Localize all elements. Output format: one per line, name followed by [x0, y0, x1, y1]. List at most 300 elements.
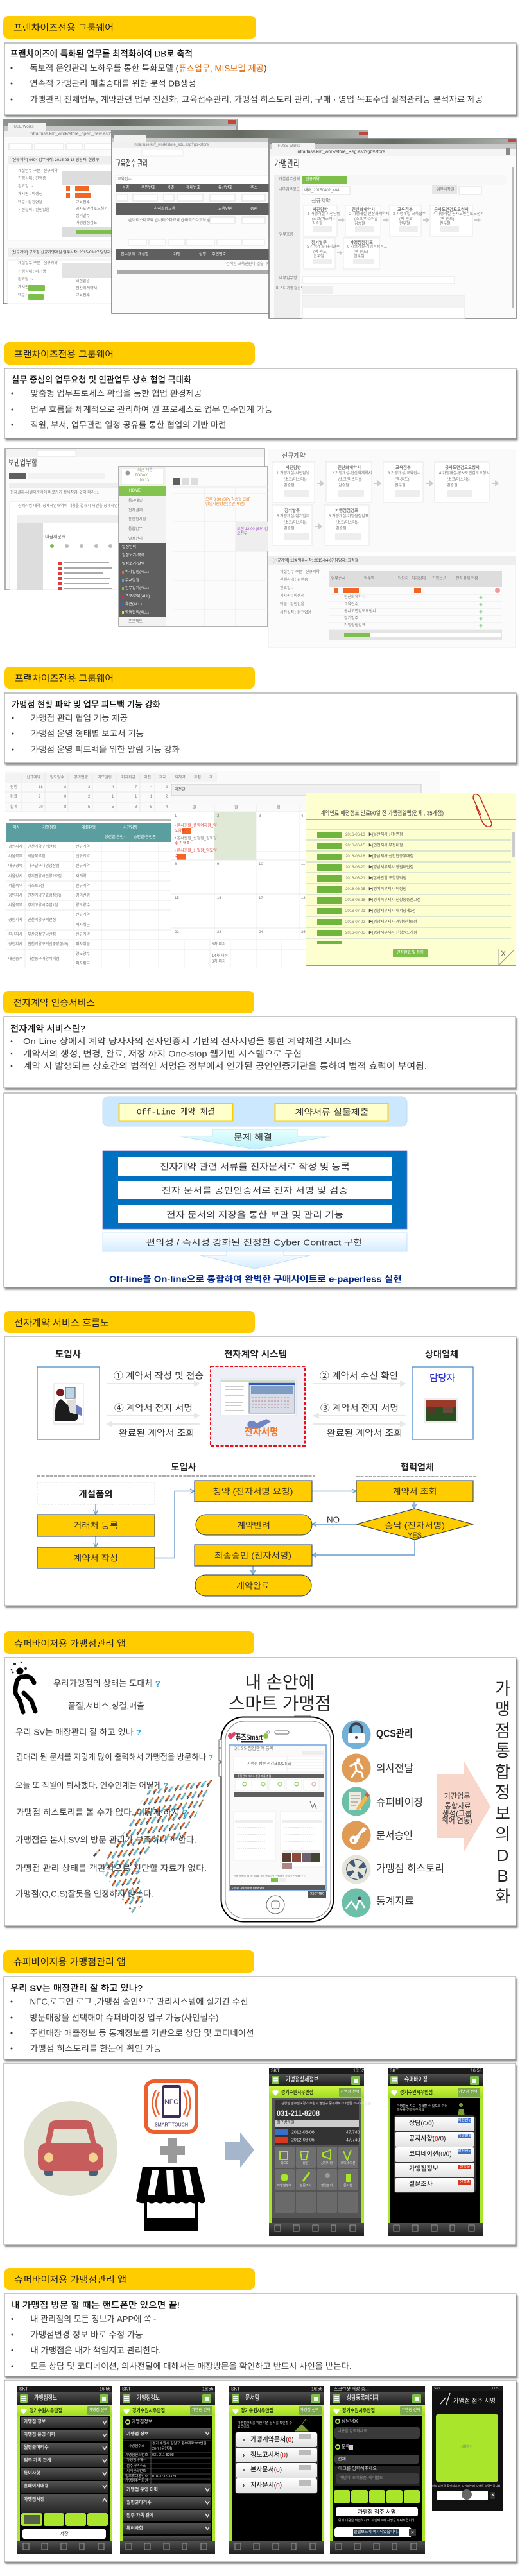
table: teal store list: 8차 퍼자 — [212, 959, 226, 964]
text block: franchise DB: 가맹관리 전체업무, 계약관련 업무 전산화, 교육접수관리, 가맹점 히스토리 관리, 구매 · 영업 목표수립 실적관리등 분석자료 제공 — [30, 95, 483, 104]
text block: collaboration: 맞춤형 업무프로세스 확립을 통한 협업 환경제공 — [31, 389, 202, 398]
note: expiring contracts: 2016-06-20 — [345, 866, 365, 870]
screenshot: calendar with sidebar menu: 오전 12:00 (SP) 김승철 회 — [237, 526, 280, 531]
section 1: groupware optimisation — [3, 16, 516, 318]
step: register partner: 거래처 등록 — [73, 1521, 118, 1530]
title: smart franchise in my hand: 스마트 가맹점 — [229, 1694, 331, 1713]
screenshot: new contract workflow: 6 가맹개설-가맹점점검표 — [329, 513, 369, 519]
screenshot: education management: 성명 — [199, 252, 206, 257]
question list: 우리가맹점의 상태는 도대체 ? — [53, 1679, 160, 1688]
screen: QCS result: 가맹점 방문 점검 내용을 확인하였으며 가맹점주 본인이 서명합니다. — [234, 1874, 306, 1878]
screenshot: calendar with sidebar menu: 일정보기-달력 — [122, 561, 144, 566]
table: teal store list: 테스트2점 — [28, 883, 44, 888]
icon: NFC smart touch: NFC — [164, 2099, 178, 2106]
phone screen: supervising: 16:53 — [471, 2069, 482, 2073]
exchange arrows and labels: ④ 계약서 전자 서명 — [114, 1403, 193, 1413]
screenshot: work progress table: 집기발주 — [344, 615, 359, 621]
phone screen: store detail: 16:52 — [353, 2069, 365, 2073]
arrow: problem solved — [180, 1129, 329, 1149]
step: contract complete: 계약완료 — [236, 1581, 270, 1590]
icon: NFC smart touch — [146, 2081, 196, 2132]
phone screen: store info detail: 점주휴대폰번호 — [125, 2473, 148, 2478]
phone screen: documents: 지사문서(0) — [250, 2481, 282, 2489]
phone screen: supervising: 설문조사 — [409, 2181, 433, 2188]
step: rejection: NO — [327, 1515, 340, 1525]
screenshot: new contract workflow: (소크(마스터)) — [284, 520, 307, 525]
arrow: integrated data: 생성(그룹 — [442, 1809, 472, 1818]
table: contract statistics: 8 — [135, 805, 137, 809]
section 7: NFC login — [3, 1950, 516, 2245]
swimlane headings: 협력업체 — [401, 1462, 434, 1472]
phone screen: consultation form: 분류 — [342, 2444, 350, 2449]
table: teal store list: 인천계양구계산중앙점(R) — [28, 941, 69, 947]
table: teal store list: 신규계약 — [76, 912, 91, 917]
screenshot: new contract workflow: (팩-원도) — [395, 477, 410, 482]
vertical title: 화 — [495, 1887, 510, 1906]
phone screen: store detail: 가맹점상세정보 — [286, 2075, 318, 2083]
screenshot: store open list: 교육접수 — [76, 293, 91, 298]
problem boxes: 계약서류 실물제출 — [295, 1108, 369, 1117]
screenshot: store open list: [신규계약] 구로점 신규가맹계실 업무시작: 2015-03-27 담당자: 김승철 — [12, 250, 123, 255]
column headings — [55, 1349, 458, 1359]
question list: 가맹점 관리 상태를 객관적으로 진단할 자료가 없다. — [15, 1864, 207, 1873]
table: contract statistics — [5, 771, 440, 812]
screenshot: new contract workflow: (소크(마스터)) — [284, 477, 307, 482]
phone screen: documents: 가맹계약문서(0) — [250, 2435, 293, 2444]
screenshot: store open list: intra.fuse.kr/f_work/store_open_new.asp?gb=store — [30, 132, 130, 136]
title: smart franchise in my hand — [229, 1673, 331, 1713]
table: contract statistics: 신규계약 — [26, 775, 41, 780]
table: teal store list: 대구달구대명남산점 — [28, 863, 60, 868]
phone screen: documents: 있습니다. — [238, 2425, 250, 2429]
screenshot: store open list: 완료일 : - — [18, 184, 33, 189]
screenshot: new contract workflow: 사전답방 — [286, 465, 301, 470]
phone screen: consultation form: 태그를 입력해주세요 — [338, 2466, 377, 2471]
arrow: result — [200, 1251, 310, 1269]
screenshot: calendar with sidebar menu: 전자결재 — [128, 508, 143, 513]
question list: 가맹점 히스토리를 볼 수가 없다. 어떻게 하지 ? — [16, 1807, 187, 1817]
screenshot: new contract workflow: 집기발주 — [284, 507, 300, 513]
blue solution panel — [103, 1151, 407, 1229]
arrow: integrated data: 통합자료 — [444, 1801, 471, 1810]
calendar: monthly schedule: 1 — [175, 814, 177, 818]
screenshot: calendar with sidebar menu: 프로젝트 — [128, 619, 143, 624]
screenshot: franchise management form: 업무시작일 — [437, 187, 455, 192]
blue solution panel: 전자 문서의 저장을 통한 보관 및 관리 기능 — [166, 1210, 343, 1219]
screenshot: store open list: 계시판 : 미생성 — [18, 191, 42, 196]
question list — [15, 1679, 213, 1898]
conclusion text: Off-line을 On-line으로 통합하여 완벽한 구매사이트로 e-paperless 실현 — [109, 1275, 402, 1284]
text block: collaboration: 업무 흐름을 체계적으로 관리하여 원 프로세스로 업무 인수인계 가능 — [31, 404, 273, 415]
note: expiring contracts: 2016-06-18 — [345, 855, 365, 859]
note: expiring contracts: ▶[경기북부지사]신상송동산고점 — [368, 897, 420, 902]
phone screen: supervising: 코디네이션(0/0) — [409, 2150, 452, 2158]
panel: app screens — [4, 2380, 516, 2562]
calendar: monthly schedule: 24 — [259, 931, 263, 934]
screenshot: store open list: 시전실적 : 완전없음 — [18, 207, 50, 212]
calendar: monthly schedule: • 본사관할_신월점_양도양 — [175, 848, 217, 853]
phone screen: store info list: 가맹점정보 — [34, 2394, 57, 2401]
section 8: store visit by phone — [4, 2268, 516, 2562]
vertical title: 합 — [495, 1762, 510, 1782]
phone screen: store info detail: 경기 수원시 팔달구 중부대로223번길 — [152, 2441, 207, 2446]
screenshot: franchise management form: (소크(마스터)) — [312, 216, 335, 221]
cyber contract bar — [103, 1233, 407, 1251]
calendar: monthly schedule: 16 — [217, 897, 221, 900]
phone screen: store info detail: 가맹점 정보 — [126, 2431, 149, 2436]
phone screen: store detail: 영업관리 — [321, 2183, 333, 2188]
step: view contract: 계약서 조회 — [393, 1486, 437, 1497]
table: contract statistics: 이전 — [144, 775, 151, 780]
phone screen: supervising: 공지사항(0/0) — [409, 2134, 446, 2142]
panel: NFC flow — [4, 2063, 516, 2245]
screenshot: franchise management form: 1 가맹개설-사전답방 — [308, 211, 341, 216]
heading: e-contract service: 전자계약 인증서비스 — [13, 997, 95, 1008]
table: contract statistics: 2 — [166, 795, 168, 799]
phone screen: consultation form: 기념식, 도기용품, 레이블드 — [340, 2475, 383, 2480]
section 2: groupware collaboration — [4, 342, 516, 648]
screenshot: franchise management form: 신규계약 — [306, 176, 320, 182]
vertical title: 맹 — [495, 1699, 510, 1719]
screenshot: calendar with sidebar menu: HOME — [129, 489, 141, 493]
vertical title: 의 — [495, 1825, 510, 1844]
screen: QCS result: QCSS 점검결과 등록 — [234, 1746, 274, 1751]
screenshot: store open list: 완료일 : - — [18, 277, 33, 282]
screenshot: store open list: 시전답방 — [76, 279, 91, 284]
text block: phone is enough: 가맹점변경 정보 바로 수정 가능 — [31, 2330, 143, 2340]
phone screen: documents: › — [243, 2467, 245, 2473]
phone screen: store info detail: 점주사택주소 — [126, 2463, 146, 2468]
screenshot: work progress table: 업무명 — [364, 576, 375, 581]
screenshot: work progress table: 전자결재 현황 — [456, 576, 478, 581]
blue solution panel: 전자 문서를 공인인증서로 전자 서명 및 검증 — [162, 1186, 348, 1195]
step: write contract — [37, 1547, 155, 1568]
table: contract statistics: 해지 — [159, 775, 166, 780]
screenshot: franchise management form: 업무흐름 — [279, 232, 294, 237]
step: subscription: 청약 (전자서명 요청) — [213, 1486, 293, 1497]
phone screen: store detail: 47,740 — [346, 2138, 360, 2142]
text block: what is e-contract: 전자계약 서비스란? — [10, 1024, 85, 1033]
table: teal store list: 상신일/승점시 — [105, 834, 127, 839]
text block: collaboration: 실무 중심의 업무요청 및 연관업무 상호 협업 극대화 — [12, 375, 192, 385]
phone screen: store detail: 설문조사 — [300, 2183, 312, 2188]
phone screen: supervising: 상담(0/0) — [409, 2119, 434, 2127]
screenshot: calendar with sidebar menu: 오전부 — [237, 531, 248, 536]
screenshot: education management: 참석희망교육 — [154, 206, 176, 211]
table: teal store list: 서울북부 — [8, 902, 23, 907]
screenshot: calendar with sidebar menu: 최근 처음 — [137, 467, 153, 472]
icon: NFC smart touch: SMART TOUCH — [155, 2122, 188, 2128]
panel: smart franchise — [4, 1658, 516, 1926]
screenshot: work progress table: 업무순서 — [331, 576, 345, 581]
phone screen: supervising: 가맹점정보 — [409, 2164, 438, 2173]
note: expiring contracts: 계약만료 예정점포 만료90일 전 가맹점알림(전체 : 35개점) — [320, 810, 444, 818]
phone mockup — [219, 1715, 334, 1921]
screenshot: work progress table: [신규계약] 124 업무시작: 2015-04-07 담당자: 최경철 — [273, 558, 358, 563]
step: register partner — [37, 1515, 155, 1536]
screenshot: sent work box: 보낸업무함 — [8, 458, 37, 467]
step: final approval: 최종승인 (전자서명) — [214, 1550, 291, 1561]
screenshot: new contract workflow: 1 가맹개설-사전답방 — [277, 470, 310, 476]
screenshot: education management: 성별 — [167, 185, 174, 190]
phone screen: consultation form: 상담내용 — [342, 2418, 358, 2423]
screenshot: new contract workflow: 3 가맹개설-교육접수 — [388, 470, 421, 476]
phone screen: store detail: 코디네이션 — [340, 2161, 356, 2165]
text block: franchise DB: 연속적 가맹관리 매출증대를 위한 분석 DB생성 — [30, 78, 196, 89]
table: teal store list: 서울강서 — [8, 873, 22, 879]
phone screen: store detail: 가맹점정보 — [277, 2183, 292, 2188]
screenshot: store open list: 개설업무 구분 : 신규계약 — [18, 261, 58, 266]
arrow: to app screens — [225, 2133, 254, 2168]
note: expiring contracts: ▶[경남서부지사]경남대학트점 — [368, 919, 417, 924]
section 6: supervisor app problems — [4, 1631, 516, 1926]
phone screen: documents: 문서함 — [245, 2394, 259, 2401]
screenshot: new contract workflow: 가맹점점검표 — [335, 507, 358, 513]
column headings: 전자계약 시스템 — [224, 1349, 287, 1359]
arrow: problem solved: 문제 해결 — [234, 1132, 272, 1142]
phone screen: documents: 16:56 — [311, 2387, 323, 2391]
calendar: monthly schedule: • 본사관할_중학여자점_양 — [175, 823, 217, 828]
calendar: monthly schedule: 2 — [217, 814, 220, 818]
table: contract statistics: 2 — [39, 795, 41, 799]
phone screen: store info list: 가맹점사진 — [24, 2496, 44, 2502]
swimlane headings — [37, 1462, 476, 1477]
screenshot: franchise management form: 2 가맹개설-전산화계약서 — [349, 211, 389, 216]
note: expiring contracts: 2016-07-02 — [345, 920, 365, 924]
screenshot: work progress table: 완료일 : - — [280, 585, 295, 590]
phone screen: store detail: 2012-08-06 — [291, 2131, 315, 2134]
text block: SV management: NFC,로그인 로그 ,가맹점 승인으로 관리시스템에 실기간 수신 — [30, 1997, 248, 2006]
screenshot: calendar with sidebar menu: 영업협의(ALL) — [125, 610, 149, 615]
screenshot: sent work box: 상세작업 내역 (상세작업내역의 내용을 결재시 의견을 상세작업내역에 대한 의견이 입력) — [18, 503, 158, 508]
screenshot: store open list: 공사도면검토요청서 — [76, 206, 108, 211]
screenshot: store open list: 전산화계약서 — [76, 286, 97, 291]
phone screen: supervising: 작성완료 — [458, 2118, 472, 2123]
icon: confused person — [11, 1662, 35, 1712]
feature: communication — [342, 1753, 413, 1783]
title: smart franchise in my hand: 내 손안에 — [245, 1673, 315, 1692]
screenshot: franchise management form: 공사도면검토요청서 — [434, 207, 469, 212]
screenshot: new contract workflow: 권우철 — [395, 483, 406, 488]
calendar: monthly schedule: 25 — [301, 931, 306, 934]
phone screen: supervising — [388, 2068, 483, 2236]
counterpart box: 담당자 — [429, 1373, 455, 1383]
phone screen: store info list: 특이사항 — [24, 2469, 40, 2476]
decision: acceptance: YES — [408, 1530, 422, 1540]
note: expiring contracts: ▶[경기북부지사]덕정점 — [368, 886, 406, 891]
screenshot: work progress table: 전산화계약서 — [344, 594, 365, 599]
screenshot: calendar with sidebar menu: 일정관리 — [128, 536, 143, 541]
note: expiring contracts: 2016-06-13 — [345, 833, 365, 837]
table: contract statistics: 휴점 — [194, 775, 201, 780]
screenshot: education management: 성명 — [122, 185, 129, 190]
vertical title: D — [497, 1846, 508, 1865]
heading: groupware 2: 프랜차이즈전용 그룹웨어 — [14, 349, 114, 359]
screenshot: store open list: 댓글 : 완전없음 — [18, 200, 43, 205]
table: teal store list: 14차 처전 — [212, 953, 228, 958]
problem boxes: Off-Line 계약 체결 — [137, 1108, 215, 1117]
column headings: 상대업체 — [425, 1349, 458, 1359]
phone screen: consultation form: 경기수원시우만점 — [342, 2407, 375, 2414]
screenshot: new contract workflow: 김승철 — [284, 483, 295, 488]
vertical title: 통 — [495, 1741, 510, 1760]
text block: feedback: 가맹점 운영 피드백을 위한 알림 기능 강화 — [31, 744, 180, 755]
heading: supervisor app 2: 슈퍼바이저용 가맹점관리 앱 — [13, 1957, 126, 1967]
text block: what is e-contract: 계약 시 발생되는 상호간의 법적인 서명은 정부에서 인가된 공인인증기관을 통하여 법적 효력이 부여됨. — [23, 1061, 427, 1070]
table: contract statistics: 재계약 — [175, 775, 186, 780]
screenshot: franchise management form: 가맹점점검표 — [350, 239, 373, 245]
screenshot: sent work box: 내결재문서 — [45, 534, 65, 539]
screenshot: calendar with sidebar menu: 일정보기-목록 — [122, 553, 145, 558]
calendar: monthly schedule: 10 — [259, 863, 263, 866]
icon: paperclip — [473, 794, 492, 827]
phone screen: store info detail: 가맹점세대수 — [126, 2457, 146, 2462]
screenshot: franchise management form — [269, 139, 516, 318]
table: teal store list: 명의변경 — [76, 893, 90, 898]
phone screen: store detail: 공지사항 — [321, 2161, 333, 2165]
step: rejection — [196, 1515, 340, 1535]
flowchart connectors — [96, 1491, 415, 1575]
table: contract statistics: 3 — [88, 786, 91, 789]
section 3: groupware feedback — [4, 667, 516, 968]
phone screen: owner signature: × — [491, 2493, 494, 2498]
screenshot: new contract workflow: (소크(마스터)) — [447, 477, 470, 482]
table: teal store list: 재계약 — [76, 873, 87, 879]
note: expiring contracts: ▶[충남지사]신천안중부대점 — [368, 854, 413, 859]
table: contract statistics: 완료 — [10, 794, 18, 799]
screenshot: calendar with sidebar menu: 통합전사함 — [128, 517, 146, 522]
table: teal store list: 신규계약 — [76, 863, 91, 868]
phone screen: documents: 정보고시서(0) — [250, 2451, 288, 2459]
app logo — [228, 1732, 268, 1743]
phone screen: store info detail: 월평균마리수 — [126, 2499, 152, 2505]
exchange arrows and labels: ③ 계약서 전자 서명 — [320, 1403, 399, 1413]
table: teal store list: 개설유형 — [82, 825, 96, 830]
table: teal store list: 퍼자취급 — [76, 961, 91, 966]
phone screen: supervising: 가맹점을 지도 · 검색할 수 있도록 여러 — [397, 2104, 447, 2108]
table: contract statistics: 1 — [135, 795, 137, 799]
feature: store history — [342, 1855, 444, 1884]
screenshot: calendar with sidebar menu: 명입지원방문(본인 제안) — [205, 501, 245, 506]
phone screen: store info list: 가맹점 운영 이력 — [24, 2431, 55, 2437]
phone screen: store detail: 문서함 — [343, 2183, 352, 2188]
arrow: integrated data: 기간업무 — [444, 1792, 470, 1801]
screenshot: calendar with sidebar menu: 통근메일 — [128, 498, 143, 503]
screenshot: franchise management form: 집기발주 — [311, 239, 327, 245]
text block: SV management: 우리 SV는 매장관리 잘 하고 있나? — [10, 1983, 143, 1993]
phone screen: documents: › — [243, 2436, 245, 2444]
table: contract statistics: 5 — [88, 805, 91, 809]
phone screen: documents: › — [243, 2451, 245, 2459]
phone screen: store detail: 가맹점 선택 — [340, 2089, 360, 2094]
phone screen: store info detail: 031-211-8208 — [152, 2453, 174, 2457]
decision: acceptance: 승낙 (전자서명) — [385, 1521, 445, 1530]
screenshot: work progress table: 시전실적 : 완전없음 — [280, 610, 312, 615]
table: contract statistics: 5 — [150, 805, 153, 809]
swimlane headings: 도입사 — [171, 1462, 196, 1472]
screenshot: franchise management form: 내부업무명 — [279, 275, 297, 280]
note: expiring contracts: 2016-06-25 — [345, 888, 365, 891]
arrow: integrated data — [437, 1760, 490, 1853]
feature: QCS: QCS관리 — [376, 1728, 413, 1739]
table: teal store list: 서울북부 — [8, 854, 23, 859]
phone screen: documents: 가맹점 선택 — [300, 2407, 319, 2412]
phone screen: store info detail: 가맹점 운영 이력 — [126, 2486, 158, 2493]
calendar: monthly schedule: 도양수 — [175, 828, 186, 833]
screenshot: franchise management form: 6 가맹개설-가맹점점검표 — [347, 244, 388, 249]
screenshot: new contract workflow: 전산화계약서 — [338, 465, 361, 470]
note: expiring contracts: 2016-06-28 — [345, 898, 365, 902]
calendar: monthly schedule: • 본사관할_신월점_양도양 — [175, 836, 217, 841]
screenshot: franchise management form: 신규계약 — [311, 198, 331, 204]
screenshot: education management: 교육접수 관리 — [116, 158, 148, 169]
text block: feedback: 가맹점 현황 파악 및 업무 피드백 기능 강화 — [12, 700, 161, 710]
note: expiring contracts: ▶[울산지사]신정연점 — [368, 832, 403, 837]
phone screen: store detail: 상담 — [302, 2161, 309, 2165]
note: expiring contracts: ▶[경남서부지사]신창원도계점 — [368, 930, 417, 935]
table: teal store list: 신규계약 — [76, 844, 91, 849]
screenshot: education management: intra.fuse.kr/f_work/store_edu.asp?gb=store — [134, 143, 209, 147]
screenshot: franchise management form: 4 가맹개설-공사도면검토요청서 — [433, 211, 484, 216]
screenshot: franchise management form: 권우철 — [440, 221, 451, 226]
screenshot: education management: 주민번호 — [141, 185, 156, 190]
screenshot: calendar with sidebar menu: 부서일정 — [125, 578, 139, 583]
table: teal store list: 퍼자취급 — [76, 941, 91, 947]
screenshot: franchise management form: (팩-원도) — [354, 249, 368, 254]
phone screen: supervising: SKT — [390, 2069, 399, 2073]
step: draft approval — [37, 1482, 155, 1504]
phone screen: store info detail: 가맹점 선택 — [191, 2407, 211, 2412]
table: contract statistics: 계 — [209, 775, 213, 780]
text block: SV management — [4, 1977, 516, 2059]
note: expiring contracts: 2016-06-15 — [345, 844, 365, 848]
screenshot: calendar with sidebar menu: 업무일지(ALL) — [125, 585, 149, 590]
phone screen: store info detail: 가맹점정보 — [137, 2394, 160, 2401]
note: expiring contracts: ▶[인천지사]부천대점 — [368, 843, 403, 848]
table: teal store list: 신규계약 — [76, 883, 91, 888]
screenshot: education management: 주민번호 — [212, 252, 227, 257]
screenshot: education management: 가맹 — [173, 252, 180, 257]
phone screen: store info detail: 가맹점주소 — [128, 2443, 144, 2448]
screenshot: franchise management form: (소크(마스터)) — [354, 216, 377, 221]
screenshot: new contract workflow: 김승철 — [447, 483, 458, 488]
calendar: monthly schedule: 월 — [234, 805, 238, 810]
table: teal store list: 인천계양구계산점 — [28, 917, 56, 922]
screenshot: new contract workflow: 김승철 — [336, 526, 347, 531]
screenshot: franchise management form: 내부업무코드 — [279, 187, 300, 192]
phone screen: store info list: 홈페이지내용 — [24, 2482, 49, 2489]
screenshot: education management: 검색된 교육인원이 없습니다 — [226, 261, 271, 266]
phone screen: owner signature — [432, 2386, 503, 2511]
screenshot: sent work box: 전자결재-내결재문서에 바로가기 상세작업: 2 외 미리: 1 — [10, 490, 100, 495]
screen: QCS result — [229, 1745, 326, 1891]
table: teal store list: 가맹점명 — [42, 825, 56, 830]
exchange arrows and labels: 완료된 계약서 조회 — [327, 1429, 403, 1438]
table: teal store list: 지사 — [13, 825, 21, 830]
table: teal store list: 대구경북 — [8, 863, 23, 868]
problem boxes — [103, 1097, 407, 1126]
phone screen: supervising: 작성완료 — [458, 2133, 472, 2138]
phone screen: store detail: SKT — [271, 2069, 280, 2073]
phone screen: documents: 가맹점관리를 위한 각종 문서를 확인할 수 — [238, 2421, 293, 2425]
phone screen: store detail: 김형철 점주님 • 경기 수원시 팔달구 중부대로223번길 20-7 (우만점) — [281, 2101, 372, 2106]
app logo: 퓨즈Smart — [236, 1733, 263, 1742]
phone screen: consultation form: 위의 내용을 확인하시고, 사인패드에 서명을 부탁드립니다. — [338, 2518, 415, 2523]
phone screen: store info list: 월평균마리수 — [24, 2444, 49, 2450]
screenshot: store open list: 댓글 : — [18, 293, 28, 298]
text block: phone is enough: 내 가맹점은 내가 책임지고 관리한다. — [31, 2346, 160, 2355]
table: contract statistics: 4 — [150, 786, 153, 789]
